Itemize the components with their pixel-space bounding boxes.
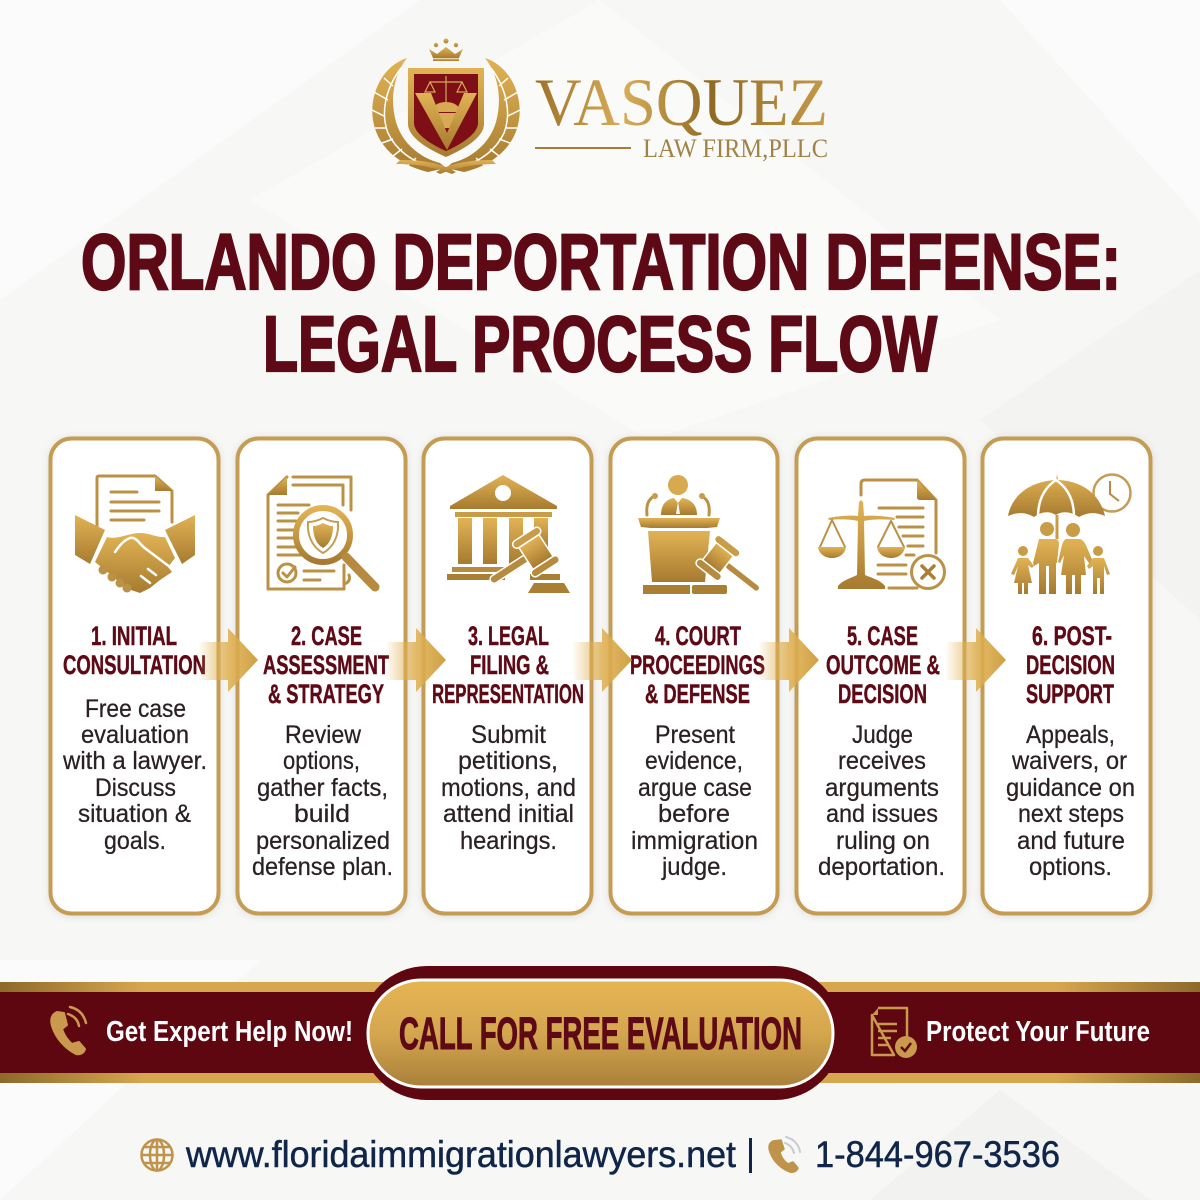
step heading: 5. CASE [847, 621, 918, 651]
title: LEGAL PROCESS FLOW [263, 299, 937, 388]
panel: step 3 legal filing and representation [424, 438, 592, 914]
icon: scales and document [818, 480, 944, 589]
step description: receives [838, 747, 926, 775]
step heading [630, 621, 765, 709]
icon: document and handshake [75, 476, 195, 593]
step heading: DECISION [838, 679, 927, 709]
icon: phone [51, 1007, 86, 1054]
step description: Submit [471, 721, 546, 749]
arrow: step 2 to 3 [385, 628, 446, 692]
card frame [610, 438, 778, 914]
step heading [432, 621, 584, 709]
step description: build [294, 800, 350, 828]
step heading: 6. POST- [1032, 621, 1112, 651]
panel: step 1 initial consultation [50, 438, 218, 914]
step description [441, 721, 576, 855]
phone number: 1-844-967-3536 [815, 1134, 1060, 1175]
step heading: 2. CASE [291, 621, 362, 651]
subtitle: LAW FIRM,PLLC [643, 134, 828, 163]
step description: personalized [256, 827, 390, 855]
step description: petitions, [458, 747, 558, 775]
step description: attend initial [443, 800, 574, 828]
step description: arguments [825, 774, 939, 802]
step description [631, 721, 758, 881]
icon: document with check [872, 1008, 917, 1058]
banner band [0, 982, 1200, 1083]
step heading: 4. COURT [655, 621, 741, 651]
contact line [142, 1134, 1060, 1175]
panel: step 2 case assessment and strategy [238, 438, 406, 914]
arrow: step 5 to 6 [945, 628, 1006, 692]
step heading: SUPPORT [1026, 679, 1114, 709]
step description: Present [655, 721, 735, 749]
button: CALL FOR FREE EVALUATION [399, 1008, 802, 1059]
step heading [263, 621, 389, 709]
divider line [535, 147, 631, 149]
step description: evidence, [645, 747, 743, 775]
step description: Appeals, [1026, 721, 1115, 749]
step description: with a lawyer. [62, 747, 207, 775]
step description: and future [1017, 827, 1125, 855]
step heading: ASSESSMENT [263, 650, 389, 680]
logo: Vasquez Law Firm [372, 38, 828, 174]
step description: Judge [852, 721, 913, 749]
step description: situation & [78, 800, 191, 828]
step description [818, 721, 945, 881]
arrow: step 3 to 4 [572, 628, 632, 692]
step description [62, 695, 207, 855]
wordmark: VASQUEZ [535, 64, 828, 140]
card frame [982, 438, 1150, 914]
step description [1006, 721, 1135, 881]
step description: motions, and [441, 774, 576, 802]
step heading: & DEFENSE [645, 679, 750, 709]
step description: Review [285, 721, 362, 749]
panel: step 4 court proceedings and defense [610, 438, 778, 914]
website: www.floridaimmigrationlawyers.net [185, 1134, 737, 1175]
step description [252, 721, 393, 881]
step description: defense plan. [252, 853, 393, 881]
step description: gather facts, [257, 774, 388, 802]
step heading [1026, 621, 1115, 709]
icon: document and magnifier [268, 477, 375, 589]
step description: and issues [826, 800, 938, 828]
icon: laurel wreath [372, 58, 520, 174]
step heading: DECISION [1026, 650, 1115, 680]
right message: Protect Your Future [926, 1016, 1150, 1048]
arrow: step 1 to 2 [198, 628, 258, 692]
arrow: step 4 to 5 [758, 628, 819, 692]
step heading: CONSULTATION [63, 650, 206, 680]
step description: goals. [104, 827, 166, 855]
step heading: FILING & [470, 650, 549, 680]
left message: Get Expert Help Now! [106, 1016, 353, 1048]
step description: hearings. [460, 827, 557, 855]
step description: evaluation [81, 721, 189, 749]
step heading: OUTCOME & [826, 650, 940, 680]
icon: phone [769, 1137, 800, 1172]
step description: options. [1029, 853, 1112, 881]
step description: immigration [631, 827, 758, 855]
icon: courthouse and gavel [447, 475, 570, 599]
step heading: 1. INITIAL [91, 621, 177, 651]
step heading: REPRESENTATION [432, 679, 584, 709]
step description: before [658, 800, 730, 828]
panel: step 5 case outcome and decision [796, 438, 964, 914]
step heading: & STRATEGY [268, 679, 384, 709]
card frame [50, 438, 218, 914]
step heading [826, 621, 940, 709]
card frame [796, 438, 964, 914]
step description: guidance on [1006, 774, 1135, 802]
step description: options, [283, 747, 360, 775]
icon: shield [408, 68, 484, 157]
title [81, 217, 1121, 388]
step heading [63, 621, 206, 680]
step description: Free case [85, 695, 186, 723]
step description: judge. [661, 853, 727, 881]
step description: ruling on [836, 827, 930, 855]
icon: globe [142, 1140, 172, 1170]
separator [749, 1138, 752, 1173]
icon: lectern and gavel [638, 475, 771, 605]
icon: umbrella, family and clock [1008, 474, 1130, 594]
call-to-action banner [0, 966, 1200, 1100]
step heading: 3. LEGAL [468, 621, 549, 651]
step description: deportation. [818, 853, 945, 881]
step description: next steps [1018, 800, 1124, 828]
card frame [424, 438, 592, 914]
icon: crown [429, 38, 463, 61]
button [360, 966, 842, 1100]
step description: waivers, or [1011, 747, 1127, 775]
step description: argue case [638, 774, 752, 802]
card frame [238, 438, 406, 914]
step heading: PROCEEDINGS [630, 650, 765, 680]
panel: step 6 post-decision support [982, 438, 1150, 914]
step description: Discuss [95, 774, 176, 802]
